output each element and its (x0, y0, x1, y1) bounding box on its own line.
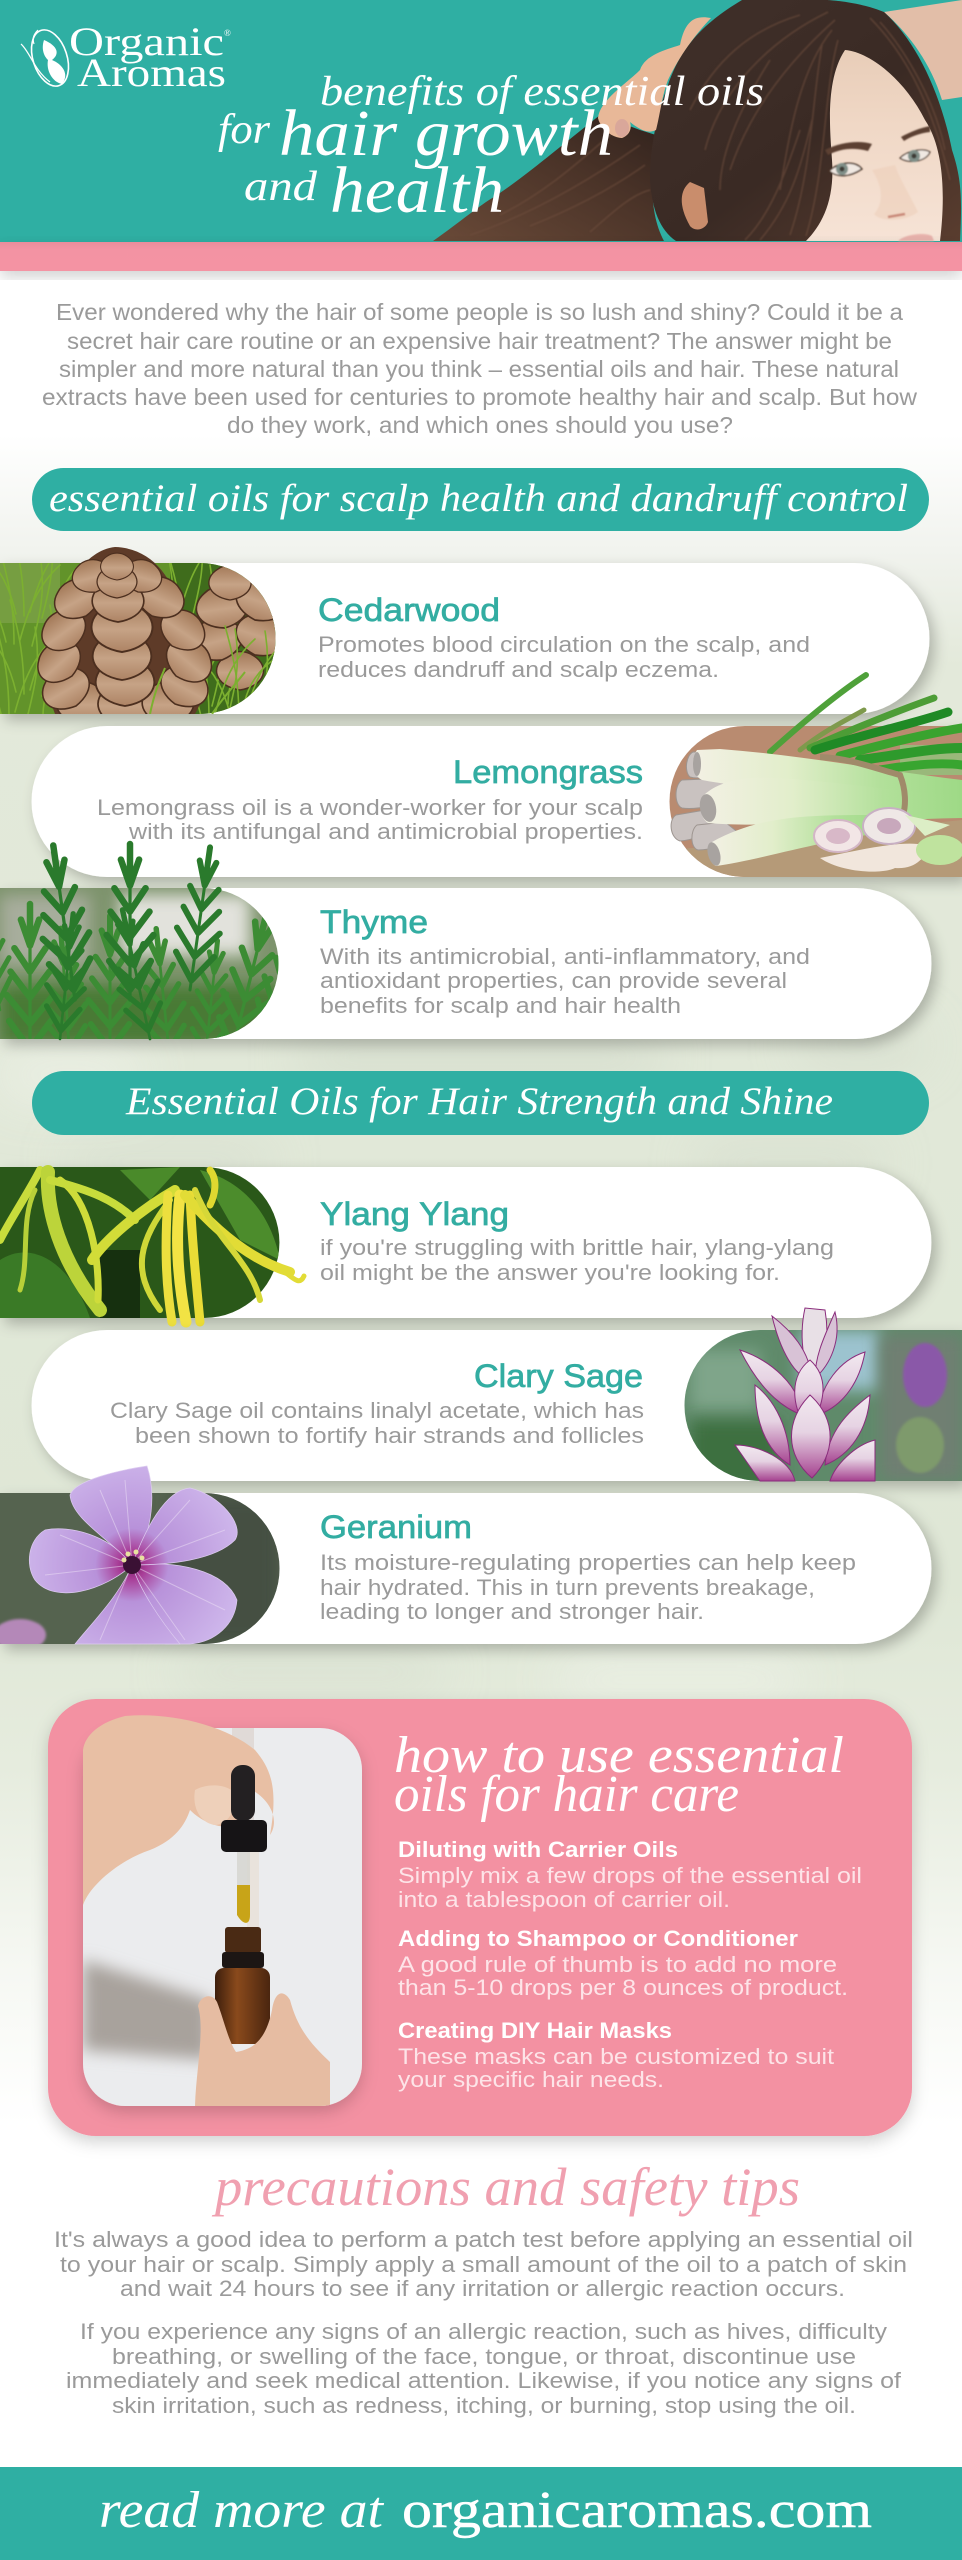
Cedarwood heading: Cedarwood (318, 592, 500, 628)
Cedarwood description (318, 632, 810, 682)
stalks (693, 749, 962, 866)
tip: masks (398, 2018, 834, 2092)
logo wordmark: Organic (69, 19, 224, 64)
precautions text: breathing, or swelling of the face, tongue, or throat, discontinue use (112, 2344, 856, 2369)
upper hand (83, 1715, 274, 1905)
tip: shampoo: Adding to Shampoo or Conditioner (398, 1926, 798, 1951)
Geranium description: leading to longer and stronger hair. (320, 1599, 704, 1624)
back stalks (671, 752, 745, 850)
precautions text: If you experience any signs of an allergic reaction, such as hives, difficulty (80, 2319, 887, 2344)
Clary Sage description (110, 1398, 644, 1448)
tip: masks: Creating DIY Hair Masks (398, 2018, 672, 2043)
Geranium description (320, 1550, 856, 1624)
logo wordmark: Aromas (77, 50, 226, 95)
Ylang Ylang description: oil might be the answer you're looking for. (320, 1260, 780, 1285)
title (218, 69, 764, 227)
header banner (0, 0, 962, 271)
intro text: do they work, and which ones should you use? (227, 412, 733, 438)
logo wordmark: ® (224, 28, 231, 38)
dropper (221, 1765, 267, 1923)
Geranium heading: Geranium (320, 1509, 472, 1545)
Thyme heading: Thyme (320, 904, 428, 940)
Thyme description: antioxidant properties, can provide several (320, 968, 787, 993)
photo: lemongrass (660, 675, 962, 877)
photo: cedar cones (0, 547, 276, 714)
Lemongrass heading: Lemongrass (453, 754, 643, 790)
tip: masks: These masks can be customized to suit (398, 2044, 834, 2069)
precautions text: immediately and seek medical attention. Likewise, if you notice any signs of (66, 2368, 902, 2393)
lower hand (195, 1993, 330, 2106)
title: hair growth (279, 97, 613, 170)
footer (0, 2467, 962, 2560)
logo (21, 19, 231, 95)
Lemongrass description: with its antifungal and antimicrobial properties. (128, 819, 643, 844)
panel: Ylang Ylang (0, 1167, 931, 1322)
precautions text (54, 2227, 913, 2418)
precautions heading: precautions and safety tips (211, 2157, 800, 2217)
Clary Sage description: Clary Sage oil contains linalyl acetate, which has (110, 1398, 644, 1423)
intro text: secret hair care routine or an expensive hair treatment? The answer might be (67, 328, 892, 354)
photo: dropper and bottle (83, 1715, 362, 2106)
title: and (244, 164, 318, 210)
intro text: Ever wondered why the hair of some people is so lush and shiny? Could it be a (56, 299, 903, 325)
Thyme description: With its antimicrobial, anti-inflammatory, and (320, 944, 810, 969)
tip: shampoo: A good rule of thumb is to add no more (398, 1952, 837, 1977)
section heading: hair strength (32, 1071, 929, 1135)
Cedarwood description: reduces dandruff and scalp eczema. (318, 657, 719, 682)
Geranium description: Its moisture-regulating properties can help keep (320, 1550, 856, 1575)
footer: read more at (99, 2482, 385, 2539)
Geranium description: hair hydrated. This in turn prevents breakage, (320, 1575, 815, 1600)
twine (820, 757, 905, 815)
tip: carrier oils: into a tablespoon of carrier oil. (398, 1887, 730, 1912)
bottle (215, 1927, 270, 2044)
tip: carrier oils: Simply mix a few drops of the essential oil (398, 1863, 862, 1888)
pink band (0, 242, 962, 271)
logo wordmark (69, 19, 231, 95)
panel: Lemongrass (32, 675, 962, 877)
section heading: scalp health (32, 468, 929, 531)
panel: Cedarwood (0, 547, 941, 727)
Cedarwood description: Promotes blood circulation on the scalp, and (318, 632, 810, 657)
tip: carrier oils (398, 1837, 862, 1912)
Clary Sage heading: Clary Sage (474, 1358, 643, 1394)
footer: organicaromas.com (402, 2482, 872, 2539)
precautions text: and wait 24 hours to see if any irritation or allergic reaction occurs. (120, 2276, 845, 2301)
panel title: oils for hair care (394, 1766, 739, 1823)
Ylang Ylang description (320, 1235, 834, 1285)
title: for (218, 107, 271, 153)
Clary Sage description: been shown to fortify hair strands and follicles (135, 1423, 644, 1448)
precautions text: to your hair or scalp. Simply apply a small amount of the oil to a patch of skin (60, 2252, 907, 2277)
Thyme description (320, 944, 810, 1018)
Lemongrass description (97, 795, 643, 844)
woman photo (433, 0, 962, 241)
sliced rings (814, 808, 962, 872)
panel: how to use (48, 1699, 912, 2136)
intro text: simpler and more natural than you think – essential oils and hair. These natural (59, 356, 899, 382)
teal header background (0, 0, 962, 242)
photo: thyme (0, 840, 278, 1040)
tip: carrier oils: Diluting with Carrier Oils (398, 1837, 678, 1862)
panel: Geranium (0, 1466, 932, 1651)
title: health (330, 154, 504, 227)
precautions text: skin irritation, such as redness, itching, or burning, stop using the oil. (112, 2393, 856, 2418)
Ylang Ylang description: if you're struggling with brittle hair, ylang-ylang (320, 1235, 834, 1260)
panel title: how to use essential (394, 1727, 844, 1784)
photo: clary sage flower (680, 1308, 962, 1490)
title: benefits of essential oils (320, 69, 764, 115)
photo: ylang ylang flowers (0, 1167, 304, 1322)
panel title (394, 1727, 844, 1823)
section heading: hair strength: Essential Oils for Hair Strength and Shine (125, 1080, 833, 1123)
leaves (770, 675, 962, 770)
Ylang Ylang heading: Ylang Ylang (320, 1196, 509, 1232)
tip: shampoo: than 5-10 drops per 8 ounces of product. (398, 1975, 848, 2000)
tip: shampoo (398, 1926, 848, 2000)
section heading: scalp health: essential oils for scalp health and dandruff control (49, 477, 908, 520)
intro text: extracts have been used for centuries to promote healthy hair and scalp. But how (42, 384, 917, 410)
panel: Thyme (0, 842, 932, 1066)
tip: masks: your specific hair needs. (398, 2067, 664, 2092)
intro text (42, 299, 917, 438)
facial features (825, 126, 934, 241)
precautions text: It's always a good idea to perform a patch test before applying an essential oil (54, 2227, 913, 2252)
photo: geranium flower (0, 1466, 290, 1651)
panel: Clary Sage (32, 1308, 962, 1490)
Lemongrass description: Lemongrass oil is a wonder-worker for your scalp (97, 795, 643, 820)
Thyme description: benefits for scalp and hair health (320, 993, 681, 1018)
icon: butterfly (21, 25, 75, 91)
